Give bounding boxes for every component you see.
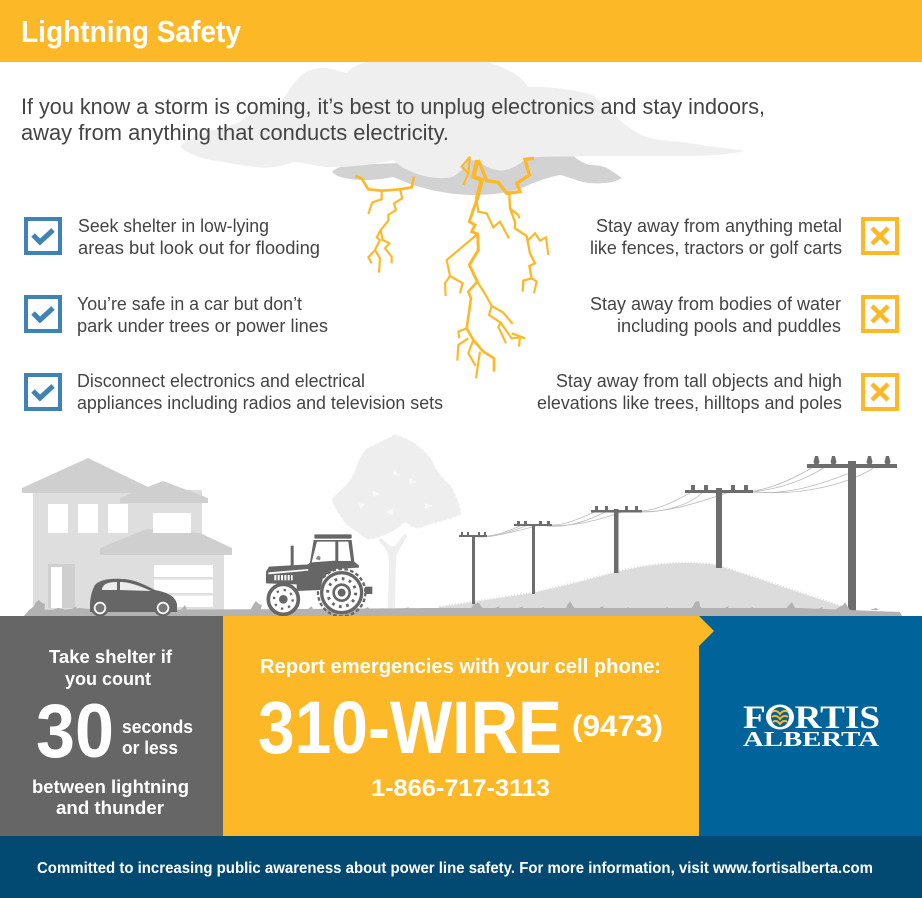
cab roof [314,534,352,539]
panel: shelter count: between lightning [32,777,189,797]
check item 3: appliances including radios and television sets [77,393,443,413]
right bolt [478,158,548,293]
cross item 3 [537,371,897,413]
cross item 3: elevations like trees, hilltops and poles [537,393,842,413]
cross item 1: like fences, tractors or golf carts [590,238,842,258]
panel: shelter count: seconds [122,717,193,737]
panel: report emergencies: 1-866-717-3113 [371,775,550,802]
pole 1 [459,532,487,604]
footer [0,836,922,898]
cross item 1: Stay away from anything metal [596,216,842,236]
panel arrow [699,616,714,646]
phone number: 310-WIRE [258,686,562,769]
left bolt [355,176,414,273]
intro text [21,94,765,145]
don't list [537,216,897,413]
cross item 1 [590,216,897,258]
grass strip [24,600,902,616]
check item 1: Seek shelter in low-lying [78,216,269,236]
pole 3 [591,506,642,573]
logo: Fortis Alberta: ALBERTA [743,727,880,751]
pole 2 [514,521,552,594]
wires [470,466,876,537]
car [90,579,177,616]
panel: shelter count: or less [122,738,178,758]
do list [26,216,443,413]
main bolt [445,157,525,378]
check item 1: areas but look out for flooding [78,238,320,258]
title: Lightning Safety [21,14,242,49]
check item 3 [26,371,443,413]
cross item 2: including pools and puddles [617,316,841,336]
check item 2: park under trees or power lines [77,316,328,336]
intro text: If you know a storm is coming, it’s best to unplug electronics and stay indoors, [21,94,765,119]
front wheel [268,584,298,614]
panel: shelter count [0,616,223,836]
panel: shelter count: you count [65,669,151,689]
panel: logo [699,616,922,836]
windows [312,542,335,562]
tractor [266,534,372,616]
check item 1 [26,216,320,258]
logo: Fortis Alberta: FORTIS [743,700,880,736]
check item 2 [26,294,328,336]
panel: report emergencies: (9473) [572,710,663,743]
tree [333,436,460,608]
light cloud [180,62,745,178]
power poles and wires [459,456,897,611]
intro text: away from anything that conducts electricity. [21,120,449,145]
exhaust [291,546,294,566]
rear wheel [318,569,365,616]
storm cloud [180,62,745,195]
panel: report emergencies [223,616,714,836]
panel: shelter count: Take shelter if [49,647,173,667]
dark cloud [332,153,622,195]
number 30: 30 [36,689,114,774]
check item 2: You’re safe in a car but don’t [77,294,302,314]
logo: Fortis Alberta [743,700,880,751]
body [266,540,359,591]
header band [0,0,922,62]
footer: Committed to increasing public awareness about power line safety. For more information, visit www.fortisalberta.com [37,860,873,877]
lightning bolts [355,157,548,378]
pole 5 [807,456,897,611]
pole 4 [685,485,753,568]
check item 3: Disconnect electronics and electrical [77,371,365,391]
hill [440,563,850,612]
house [22,458,232,612]
panel: shelter count: and thunder [56,798,164,818]
cross item 3: Stay away from tall objects and high [556,371,842,391]
panel: report emergencies: Report emergencies with your cell phone: [260,656,661,678]
cross item 2: Stay away from bodies of water [590,294,841,314]
cross item 2 [590,294,897,336]
